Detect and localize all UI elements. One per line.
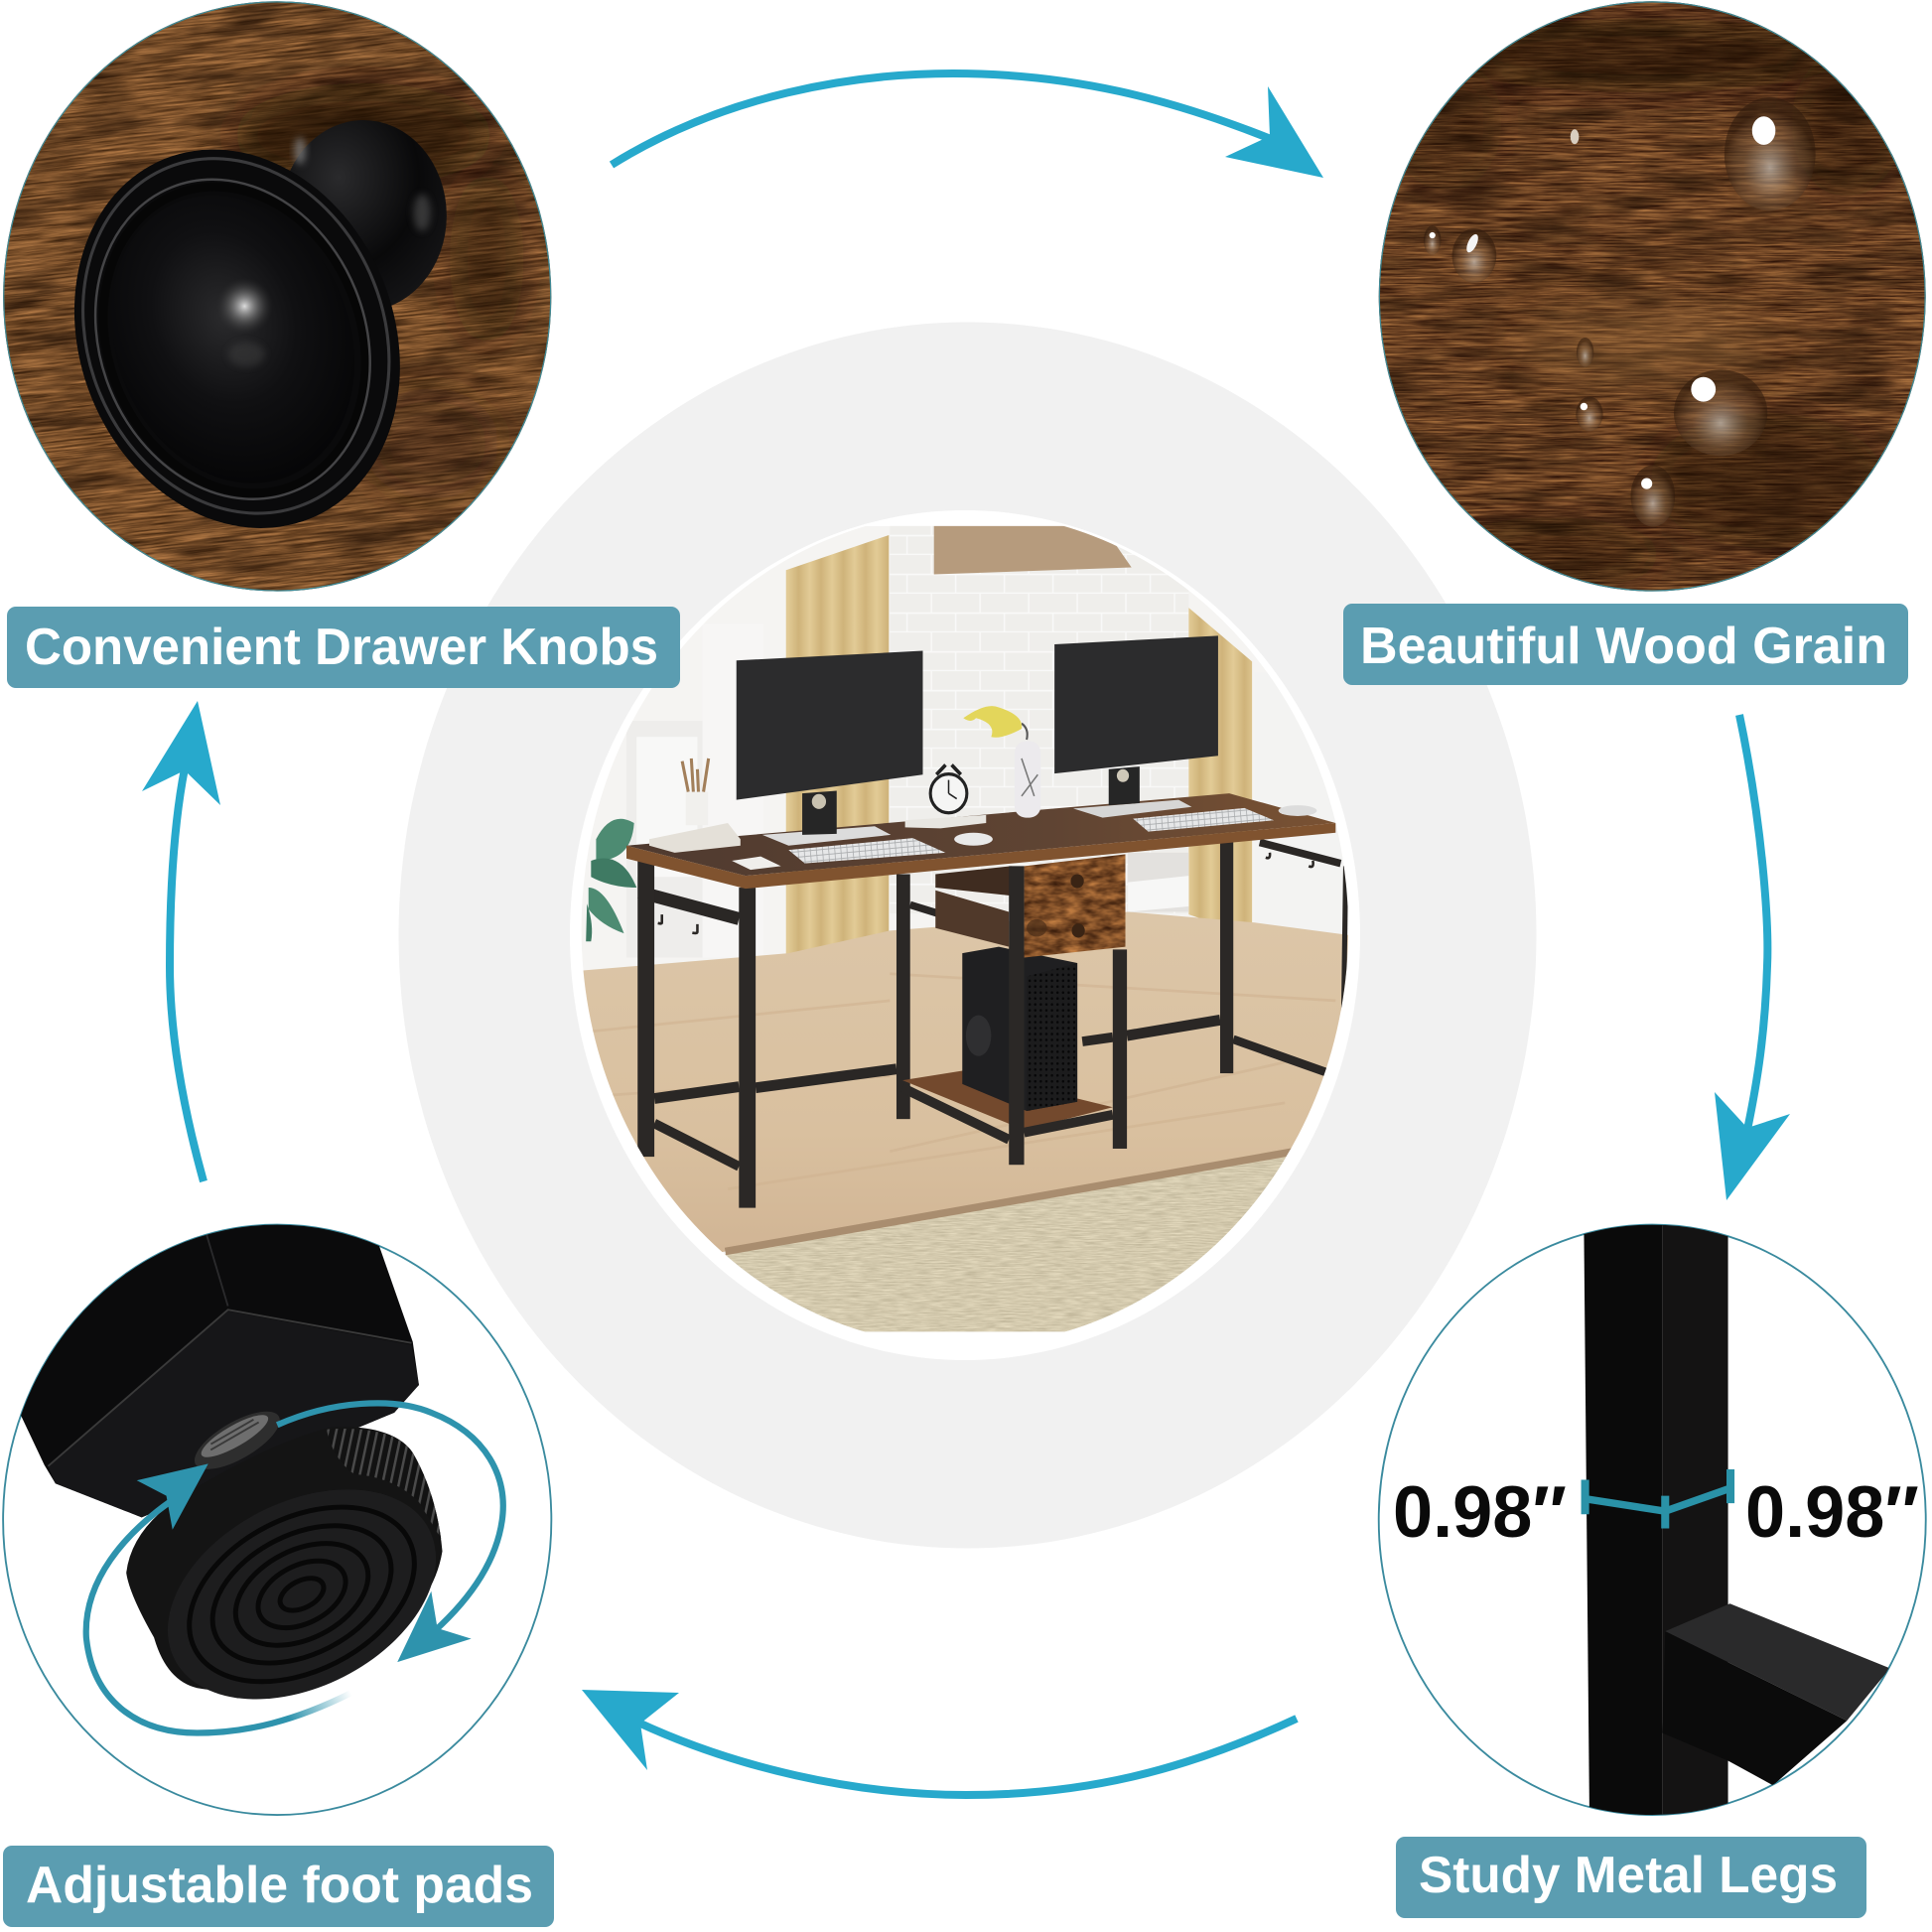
dimension right: 0.98″ <box>1745 1472 1919 1553</box>
label: Beautiful Wood Grain <box>1343 604 1908 685</box>
measure marks <box>1586 1469 1730 1529</box>
wood texture <box>3 1 552 592</box>
table top <box>626 793 1335 889</box>
panel: drawer knob photo <box>3 1 552 592</box>
keyboards and mice <box>732 805 1316 870</box>
books and pencil cup <box>649 759 741 853</box>
panel outline <box>1379 1 1926 592</box>
label: Convenient Drawer Knobs <box>7 607 680 688</box>
label: Beautiful Wood Grain: Beautiful Wood Grain <box>1360 618 1887 675</box>
desk frame, rear parts <box>639 843 1346 1167</box>
plant <box>586 819 636 941</box>
knob back ball <box>280 120 447 311</box>
shelf <box>902 1070 1113 1130</box>
right monitor <box>1054 635 1218 818</box>
grey ring behind central photo <box>399 322 1537 1549</box>
clock on books <box>905 764 986 828</box>
panel: adjustable foot pad photo <box>3 1218 551 1815</box>
threaded bolt <box>187 1400 288 1480</box>
label: Convenient Drawer Knobs: Convenient Drawer Knobs <box>25 619 658 676</box>
foot pad body <box>126 1427 472 1741</box>
arrow: wood grain to metal legs <box>1715 715 1790 1200</box>
wood texture <box>1373 0 1932 598</box>
label: Study Metal Legs: Study Metal Legs <box>1419 1847 1838 1904</box>
knob cap <box>73 149 400 528</box>
rotation arrow upper <box>277 1403 503 1662</box>
panel outline <box>3 1 551 592</box>
computer tower <box>962 947 1077 1111</box>
arrow: foot pads to knobs <box>142 701 220 1181</box>
arrow: knobs to wood grain <box>612 73 1323 178</box>
label: Adjustable foot pads <box>3 1846 554 1927</box>
dimension left: 0.98″ <box>1393 1472 1567 1553</box>
label: Study Metal Legs <box>1396 1837 1866 1918</box>
water droplets <box>1424 97 1816 527</box>
black leg block <box>12 1218 419 1517</box>
rug <box>725 1157 1287 1332</box>
vase with yellow flowers <box>963 706 1040 818</box>
cross beam <box>1665 1603 1890 1721</box>
left monitor <box>737 651 922 846</box>
label: Adjustable foot pads: Adjustable foot pads <box>26 1857 533 1914</box>
white ring around central photo <box>570 510 1360 1360</box>
panel: central desk photo <box>576 526 1356 1334</box>
panel: wood grain photo <box>1373 0 1932 598</box>
panel: sturdy metal legs photo <box>1379 1225 1926 1815</box>
vertical leg <box>1584 1225 1662 1815</box>
arrow: metal legs to foot pads <box>582 1690 1297 1795</box>
rotation arrow lower <box>86 1463 351 1733</box>
drawers <box>935 854 1126 958</box>
